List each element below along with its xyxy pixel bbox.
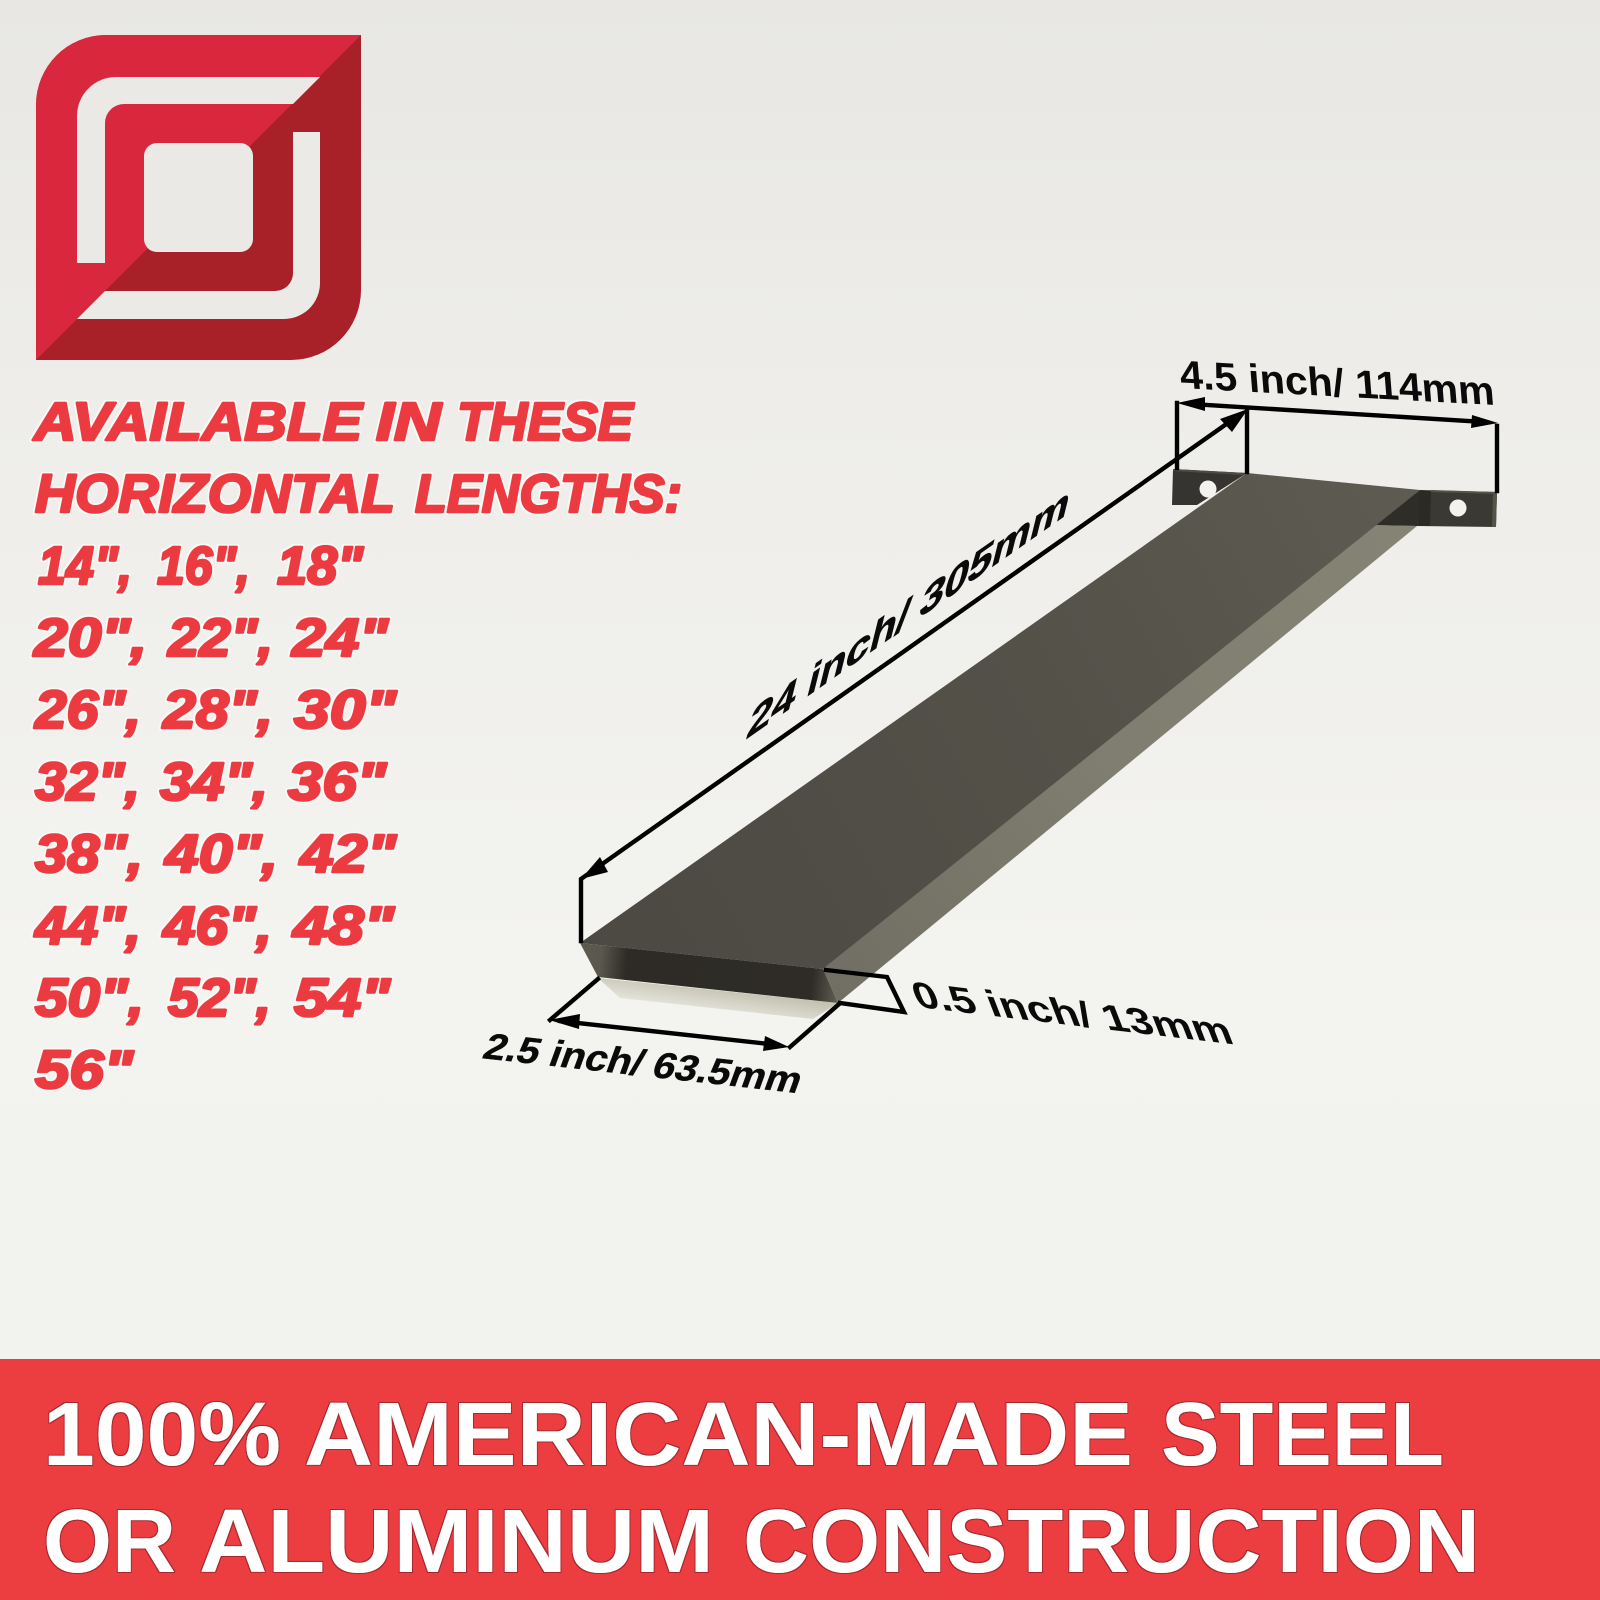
heading: available lengths: AVAILABLE	[32, 392, 364, 452]
list of lengths: 16",	[157, 536, 250, 596]
list of lengths: 26",	[34, 680, 141, 740]
top face	[580, 473, 1420, 969]
list of lengths: 18"	[277, 536, 364, 596]
list of lengths: 46",	[162, 896, 272, 956]
heading: available lengths	[32, 392, 682, 524]
front face	[580, 943, 838, 1003]
banner text: CONSTRUCTION	[743, 1492, 1480, 1592]
list of lengths: 34",	[160, 752, 268, 812]
list of lengths: 56"	[35, 1040, 135, 1100]
list of lengths: 54"	[294, 968, 392, 1028]
list of lengths: 40",	[164, 824, 278, 884]
heading: available lengths: IN	[376, 392, 442, 452]
side face inner shadow	[1373, 490, 1420, 526]
heading: available lengths: THESE	[457, 392, 635, 452]
list of lengths: 14",	[38, 536, 132, 596]
right flange	[1417, 490, 1497, 527]
dimension: 4.5 inch width	[1177, 353, 1498, 491]
banner text: 100%	[43, 1385, 281, 1485]
dimension: 2.5 inch width: 2.5 inch/ 63.5mm	[478, 1027, 808, 1101]
list of lengths: 48"	[292, 896, 396, 956]
banner text: ALUMINUM	[199, 1492, 714, 1592]
list of lengths: 36"	[288, 752, 388, 812]
list of lengths: 42"	[299, 824, 398, 884]
list of lengths	[33, 536, 398, 1100]
dimension: 24 inch length: 24 inch/ 305mm	[743, 475, 1076, 750]
list of lengths: 44",	[34, 896, 141, 956]
dimension: 0.5 inch thickness: 0.5 inch/ 13mm	[905, 974, 1239, 1053]
heading: available lengths: HORIZONTAL	[35, 464, 395, 524]
dimension: 4.5 inch width: 4.5 inch/ 114mm	[1178, 353, 1496, 414]
dimension: 2.5 inch width	[478, 979, 838, 1101]
side face	[823, 525, 1417, 1003]
list of lengths: 52",	[168, 968, 271, 1028]
floor shadow	[598, 978, 838, 1019]
list of lengths: 20",	[33, 608, 147, 668]
list of lengths: 22",	[167, 608, 273, 668]
banner text: OR	[43, 1492, 176, 1592]
list of lengths: 50",	[35, 968, 144, 1028]
bracket product	[580, 469, 1497, 1019]
banner text: AMERICAN-MADE	[304, 1385, 1133, 1485]
banner text	[43, 1385, 1480, 1592]
bottom banner	[0, 1359, 1600, 1600]
dimension: 24 inch length	[581, 409, 1248, 941]
list of lengths: 30"	[294, 680, 398, 740]
left flange	[1172, 469, 1247, 505]
list of lengths: 24"	[291, 608, 390, 668]
banner text: STEEL	[1161, 1385, 1444, 1485]
heading: available lengths: LENGTHS:	[415, 464, 682, 524]
dimension: 0.5 inch thickness	[826, 970, 1239, 1053]
logo	[36, 35, 361, 360]
list of lengths: 32",	[35, 752, 140, 812]
list of lengths: 28",	[162, 680, 273, 740]
list of lengths: 38",	[35, 824, 143, 884]
